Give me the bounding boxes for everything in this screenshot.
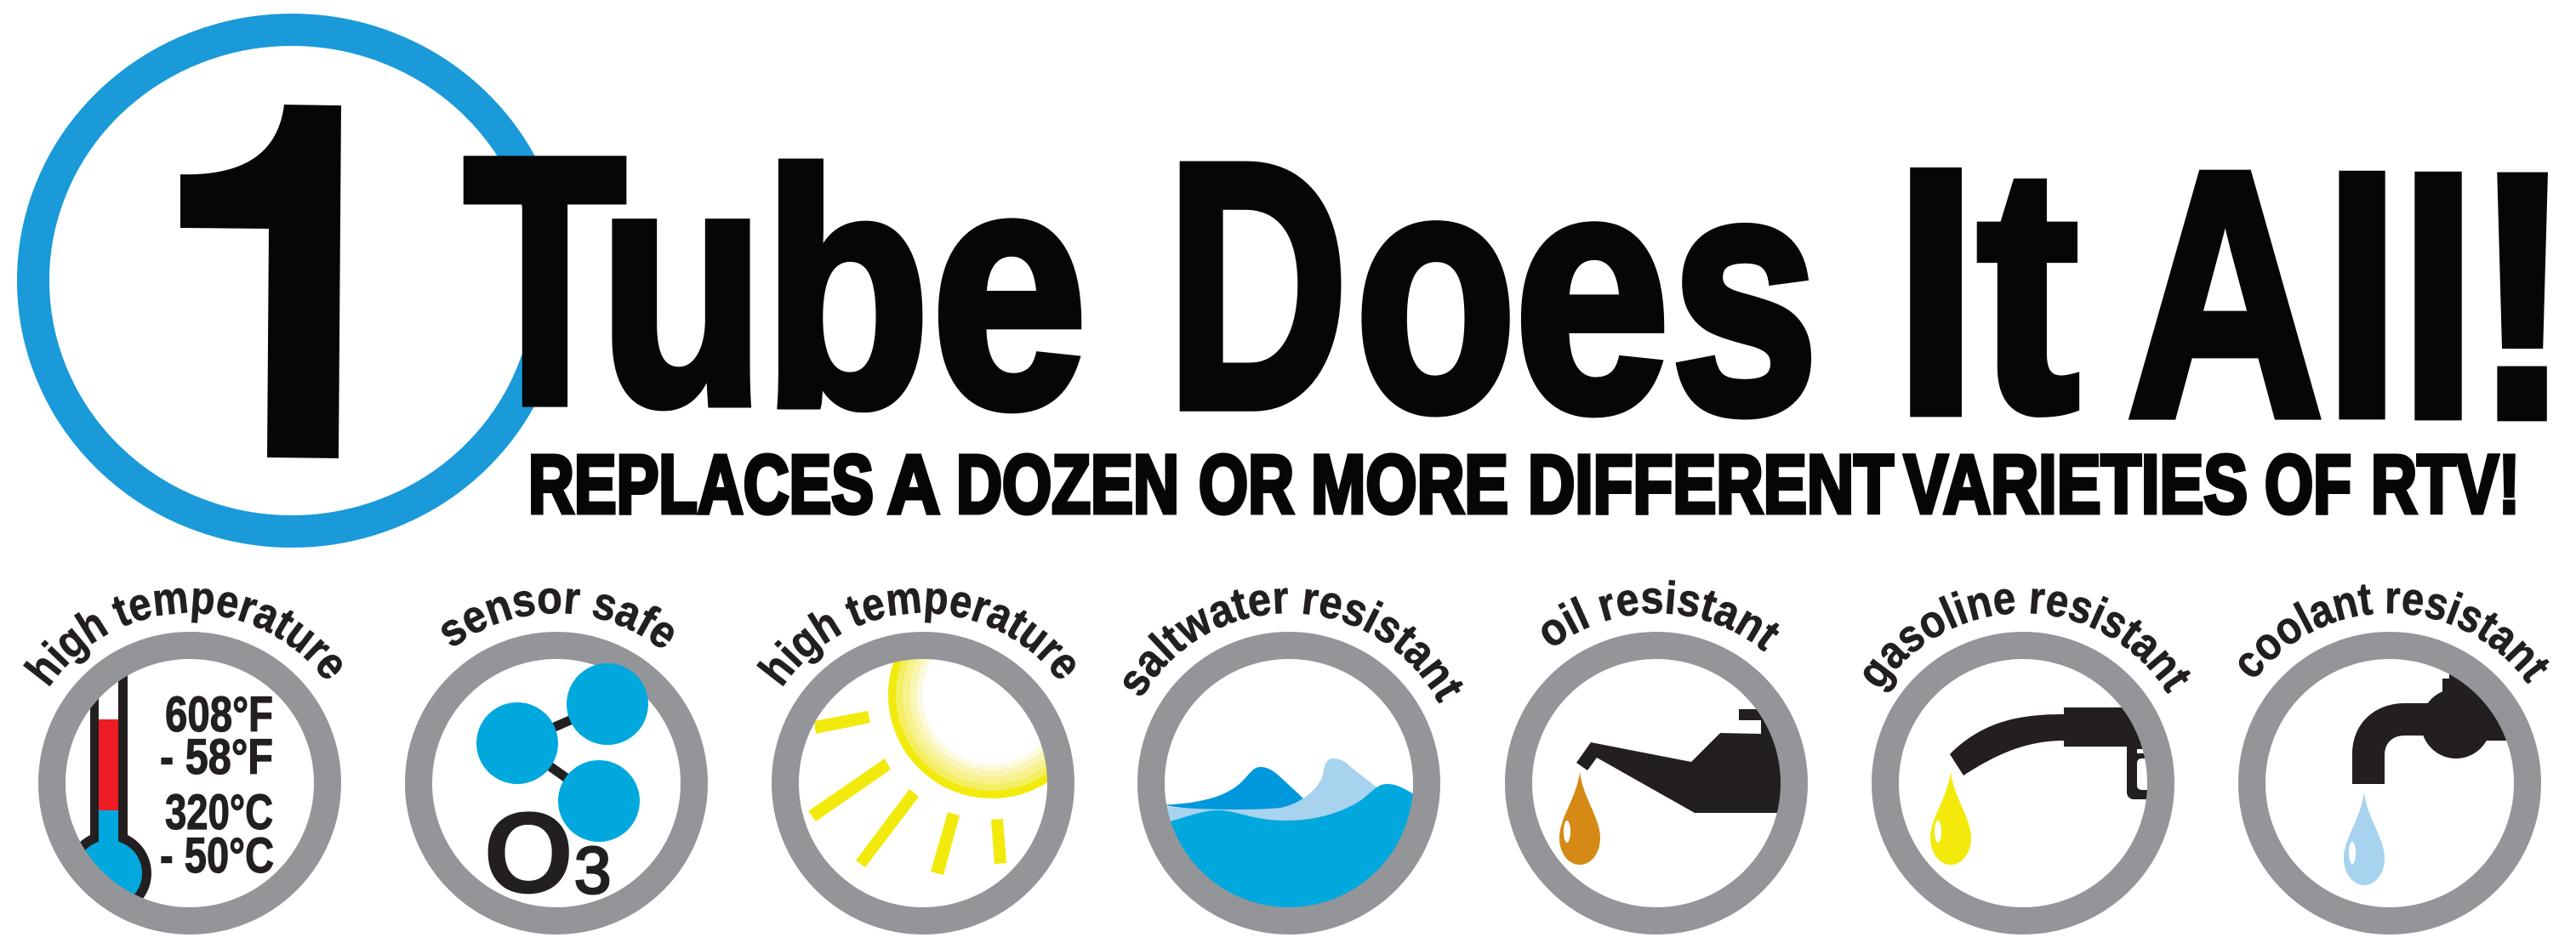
subtitle: OF [2265, 438, 2351, 531]
title: Tube Does It All! [464, 85, 2573, 491]
temperature values: 608°F [165, 687, 273, 742]
ring [2252, 645, 2528, 921]
subtitle: DOZEN [956, 438, 1179, 531]
subtitle: MORE [1311, 438, 1508, 531]
title: Tube Does It All!: T [464, 85, 625, 477]
label: high temperature: high temperature [23, 588, 342, 687]
ring [1519, 645, 1794, 921]
subtitle: REPLACES [528, 438, 874, 531]
label: sensor safe: sensor safe [442, 588, 674, 648]
numeral 1 [180, 105, 341, 458]
icon: gasoline drop [1930, 771, 1971, 865]
icon: fuel nozzle [1950, 707, 2161, 799]
title: Tube Does It All!: s [1671, 103, 1819, 485]
subtitle: RTV! [2371, 438, 2520, 531]
subtitle: A [887, 438, 940, 531]
title: Tube Does It All!: o [1355, 101, 1517, 482]
title: Tube Does It All!: A [2127, 100, 2323, 490]
icon: ozone formula: O [483, 788, 574, 918]
title: Tube Does It All!: t [1977, 95, 2079, 484]
temperature values: - 58°F [160, 730, 273, 785]
ring [52, 645, 328, 921]
icon: waves [1161, 758, 1416, 911]
icon: oil can [1576, 709, 1792, 813]
blue ring [33, 30, 550, 531]
ring [419, 645, 694, 921]
label: high temperature: high temperature [756, 588, 1075, 687]
icon: faucet [2352, 674, 2506, 784]
subtitle: VARIETIES [1904, 438, 2248, 531]
panel: high temperature sun [756, 588, 1075, 934]
title: Tube Does It All!: e [1514, 100, 1670, 482]
subtitle: OR [1199, 438, 1294, 531]
icon: coolant drop [2344, 792, 2385, 885]
label: oil resistant: oil resistant [1542, 580, 1780, 651]
temperature values: - 50°C [160, 828, 274, 883]
subtitle: DIFFERENT [1528, 438, 1894, 531]
title: Tube Does It All!: l [2399, 117, 2478, 486]
title: Tube Does It All!: u [599, 95, 765, 475]
badge: big number one in blue ring [33, 30, 550, 531]
temperature values [160, 687, 274, 883]
title: Tube Does It All!: e [931, 98, 1087, 478]
panel: coolant resistant [2238, 584, 2550, 934]
title: Tube Does It All!: l [2323, 116, 2401, 486]
icon: oil drop [1559, 771, 1600, 865]
label: saltwater resistant: saltwater resistant [1123, 588, 1463, 704]
title: Tube Does It All!: ! [2473, 101, 2573, 491]
panel: saltwater resistant [1123, 588, 1463, 934]
panel: gasoline resistant [1863, 588, 2191, 934]
label: coolant resistant: coolant resistant [2239, 584, 2550, 684]
title: Tube Does It All!: b [763, 103, 930, 475]
ring [1885, 645, 2161, 921]
panel: high temperature thermometer [23, 588, 342, 934]
ring [1151, 645, 1427, 921]
temperature values: 320°C [165, 785, 273, 840]
panel: sensor safe [405, 588, 708, 934]
title: Tube Does It All!: D [1166, 90, 1348, 480]
ring [785, 645, 1061, 921]
subtitle [528, 438, 2520, 531]
icon: ozone formula: 3 [574, 832, 611, 907]
panel: oil resistant [1505, 580, 1808, 934]
icon: sun [808, 659, 1047, 875]
icon: thermometer [80, 675, 151, 898]
label: gasoline resistant: gasoline resistant [1863, 588, 2191, 694]
title: Tube Does It All!: I [1894, 96, 1978, 487]
icon: ozone molecule [476, 663, 648, 842]
